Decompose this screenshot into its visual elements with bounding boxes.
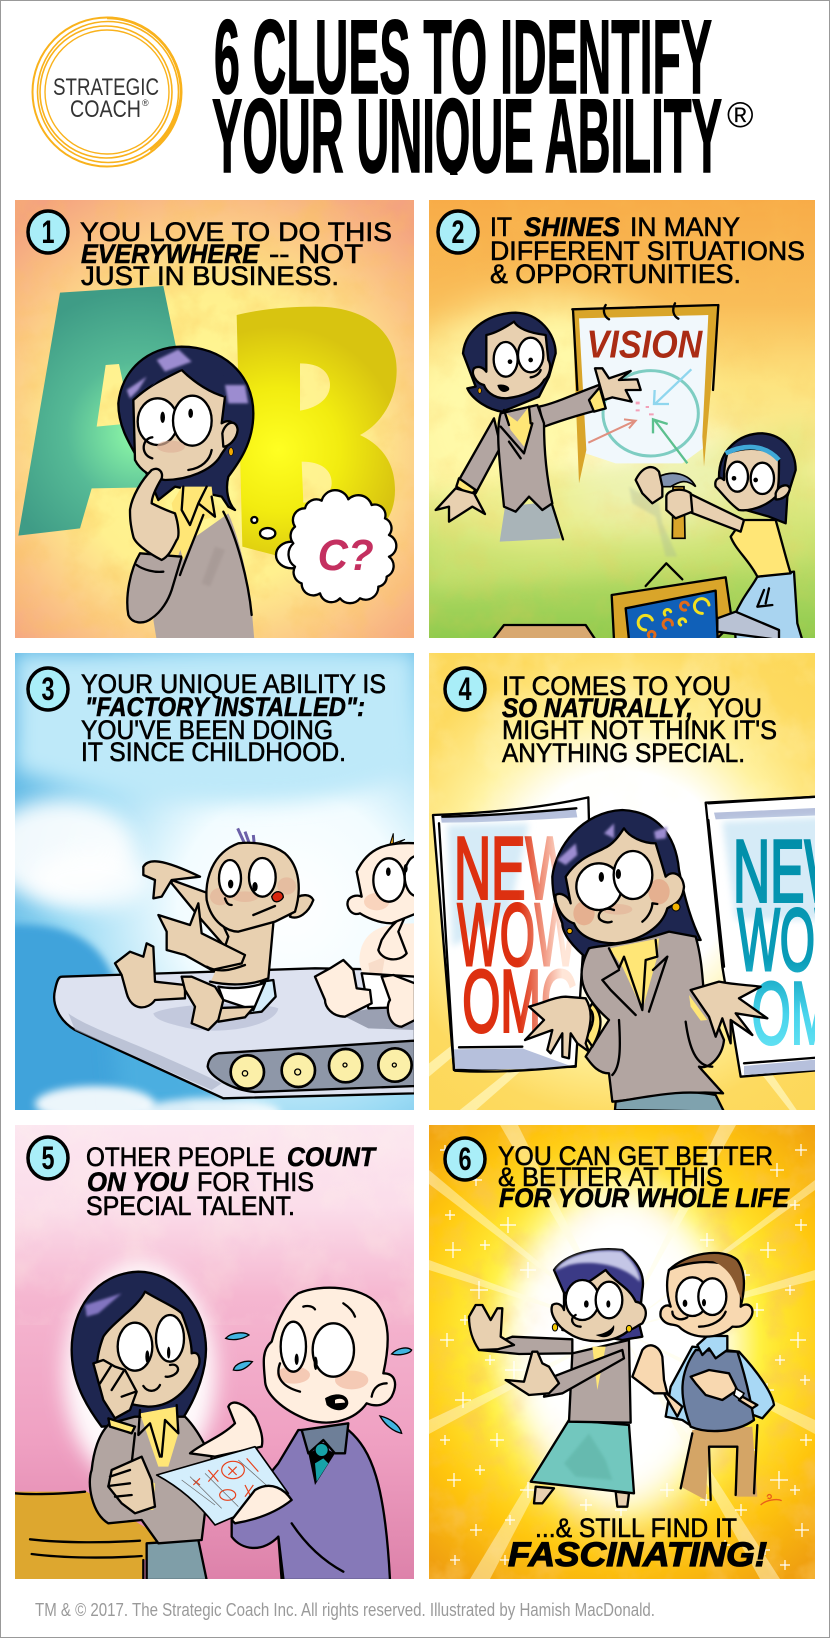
caption 1 bbox=[80, 222, 391, 286]
panel 6: better for your whole life bbox=[429, 1125, 815, 1579]
left poster: WOW bbox=[457, 885, 578, 984]
number badge 4: 4 bbox=[458, 671, 472, 707]
illustration: woman helping worried man bbox=[15, 1272, 412, 1580]
picture frame bbox=[492, 563, 732, 640]
caption 2: IN MANY bbox=[630, 212, 740, 242]
number badge 2 bbox=[438, 211, 478, 253]
thought bubble: C? bbox=[318, 532, 374, 580]
caption 2 bbox=[490, 217, 804, 284]
left poster: OMG bbox=[462, 952, 579, 1051]
number badge 3 bbox=[28, 668, 68, 710]
letter B bbox=[237, 307, 397, 556]
panel 5: others count on you bbox=[15, 1125, 414, 1580]
sky and clouds bbox=[0, 653, 414, 1126]
caption 5: SPECIAL TALENT. bbox=[86, 1191, 295, 1221]
title bbox=[212, 18, 753, 175]
caption 6: YOU CAN GET BETTER bbox=[498, 1141, 773, 1171]
sweat drops bbox=[226, 1333, 412, 1433]
panel 1: love to do this everywhere bbox=[15, 200, 414, 640]
caption 4: YOU bbox=[708, 693, 762, 723]
caption 3 bbox=[81, 674, 386, 762]
caption 4: MIGHT NOT THINK IT'S bbox=[502, 715, 777, 745]
woman thinking bbox=[118, 347, 254, 640]
illustration: woman and man bbox=[469, 1249, 782, 1507]
panel 3: factory installed bbox=[15, 653, 414, 1110]
right poster bbox=[704, 796, 815, 1078]
panel 2: it shines in many situations bbox=[400, 200, 815, 640]
conveyor belt bbox=[54, 968, 415, 1098]
number badge 3: 3 bbox=[42, 671, 54, 707]
logo: Strategic Coach bbox=[32, 18, 182, 166]
caption 1: JUST IN BUSINESS. bbox=[81, 261, 339, 291]
illustration: woman presenting vision, woman hanging picture bbox=[436, 303, 802, 640]
caption 4 bbox=[502, 676, 776, 762]
caption 3: IT SINCE CHILDHOOD. bbox=[81, 737, 346, 767]
closing caption 6 bbox=[508, 1513, 767, 1574]
caption 5 bbox=[86, 1142, 378, 1221]
number badge 4 bbox=[445, 668, 485, 710]
caption 5: ON YOU bbox=[87, 1167, 189, 1197]
caption 1: EVERYWHERE bbox=[81, 239, 260, 269]
left poster bbox=[433, 797, 590, 1072]
caption 3: YOUR UNIQUE ABILITY IS bbox=[81, 669, 386, 699]
number badge 5 bbox=[28, 1137, 68, 1179]
woman with hammer bbox=[629, 433, 802, 640]
light rays bbox=[429, 1046, 796, 1110]
number badge 1: 1 bbox=[42, 214, 54, 250]
caption 6: FOR YOUR WHOLE LIFE bbox=[499, 1183, 790, 1213]
letter A bbox=[18, 286, 176, 536]
number badge 1 bbox=[28, 211, 68, 253]
caption 1: YOU LOVE TO DO THIS bbox=[80, 217, 392, 247]
baby 1 bbox=[115, 828, 313, 1030]
caption 4: IT COMES TO YOU bbox=[502, 671, 731, 701]
logo: Strategic Coach: COACH bbox=[70, 96, 141, 123]
caption 3: YOU'VE BEEN DOING bbox=[81, 715, 333, 745]
vision poster bbox=[572, 303, 718, 483]
caption 3: "FACTORY INSTALLED": bbox=[85, 692, 365, 722]
logo: Strategic Coach: ® bbox=[142, 98, 149, 108]
caption 2: SHINES bbox=[524, 212, 620, 242]
woman gesturing bbox=[469, 1249, 646, 1507]
man in vest bbox=[632, 1253, 774, 1500]
caption 6: & BETTER AT THIS bbox=[498, 1162, 723, 1192]
caption 2: IT bbox=[490, 212, 512, 242]
caption 5: FOR THIS bbox=[197, 1167, 314, 1197]
thought bubble bbox=[251, 490, 396, 603]
panel 4: comes so naturally bbox=[429, 653, 830, 1113]
caption 2: DIFFERENT SITUATIONS bbox=[490, 236, 805, 266]
caption 5: OTHER PEOPLE bbox=[86, 1142, 275, 1172]
closing caption 6: FASCINATING! bbox=[508, 1536, 767, 1574]
number badge 2: 2 bbox=[452, 214, 464, 250]
desk bbox=[15, 1492, 157, 1580]
sparkle rays bbox=[429, 1125, 815, 1579]
caption 5: COUNT bbox=[287, 1142, 378, 1172]
footer copyright: TM & © 2017. The Strategic Coach Inc. All rights reserved. Illustrated by Hamish MacDonald. bbox=[35, 1600, 655, 1620]
number badge 6 bbox=[445, 1138, 485, 1180]
caption 1: -- NOT bbox=[269, 239, 363, 269]
caption 4: ANYTHING SPECIAL. bbox=[502, 738, 745, 768]
caption 4: SO NATURALLY, bbox=[502, 693, 693, 723]
title: ® bbox=[727, 94, 754, 135]
scribble bbox=[761, 1495, 782, 1505]
caption 6 bbox=[498, 1141, 790, 1213]
illustration: babies on conveyor bbox=[54, 828, 429, 1098]
baby 2 bbox=[314, 833, 414, 1028]
caption 2: & OPPORTUNITIES. bbox=[490, 259, 741, 289]
woman shrugging bbox=[525, 810, 767, 1112]
vision poster: VISION bbox=[587, 324, 703, 367]
logo: Strategic Coach: STRATEGIC bbox=[53, 74, 159, 101]
marked-up paper bbox=[157, 1447, 292, 1525]
left poster: NEW bbox=[454, 818, 574, 917]
number badge 5: 5 bbox=[42, 1140, 54, 1176]
closing caption 6: ...& STILL FIND IT bbox=[535, 1513, 737, 1543]
man with paper bbox=[190, 1288, 395, 1580]
woman bbox=[72, 1272, 212, 1580]
woman presenting bbox=[436, 313, 641, 542]
number badge 6: 6 bbox=[458, 1141, 472, 1177]
illustration: woman thinking of A, B, C bbox=[18, 286, 397, 640]
illustration: woman shrugging between posters bbox=[429, 796, 830, 1113]
